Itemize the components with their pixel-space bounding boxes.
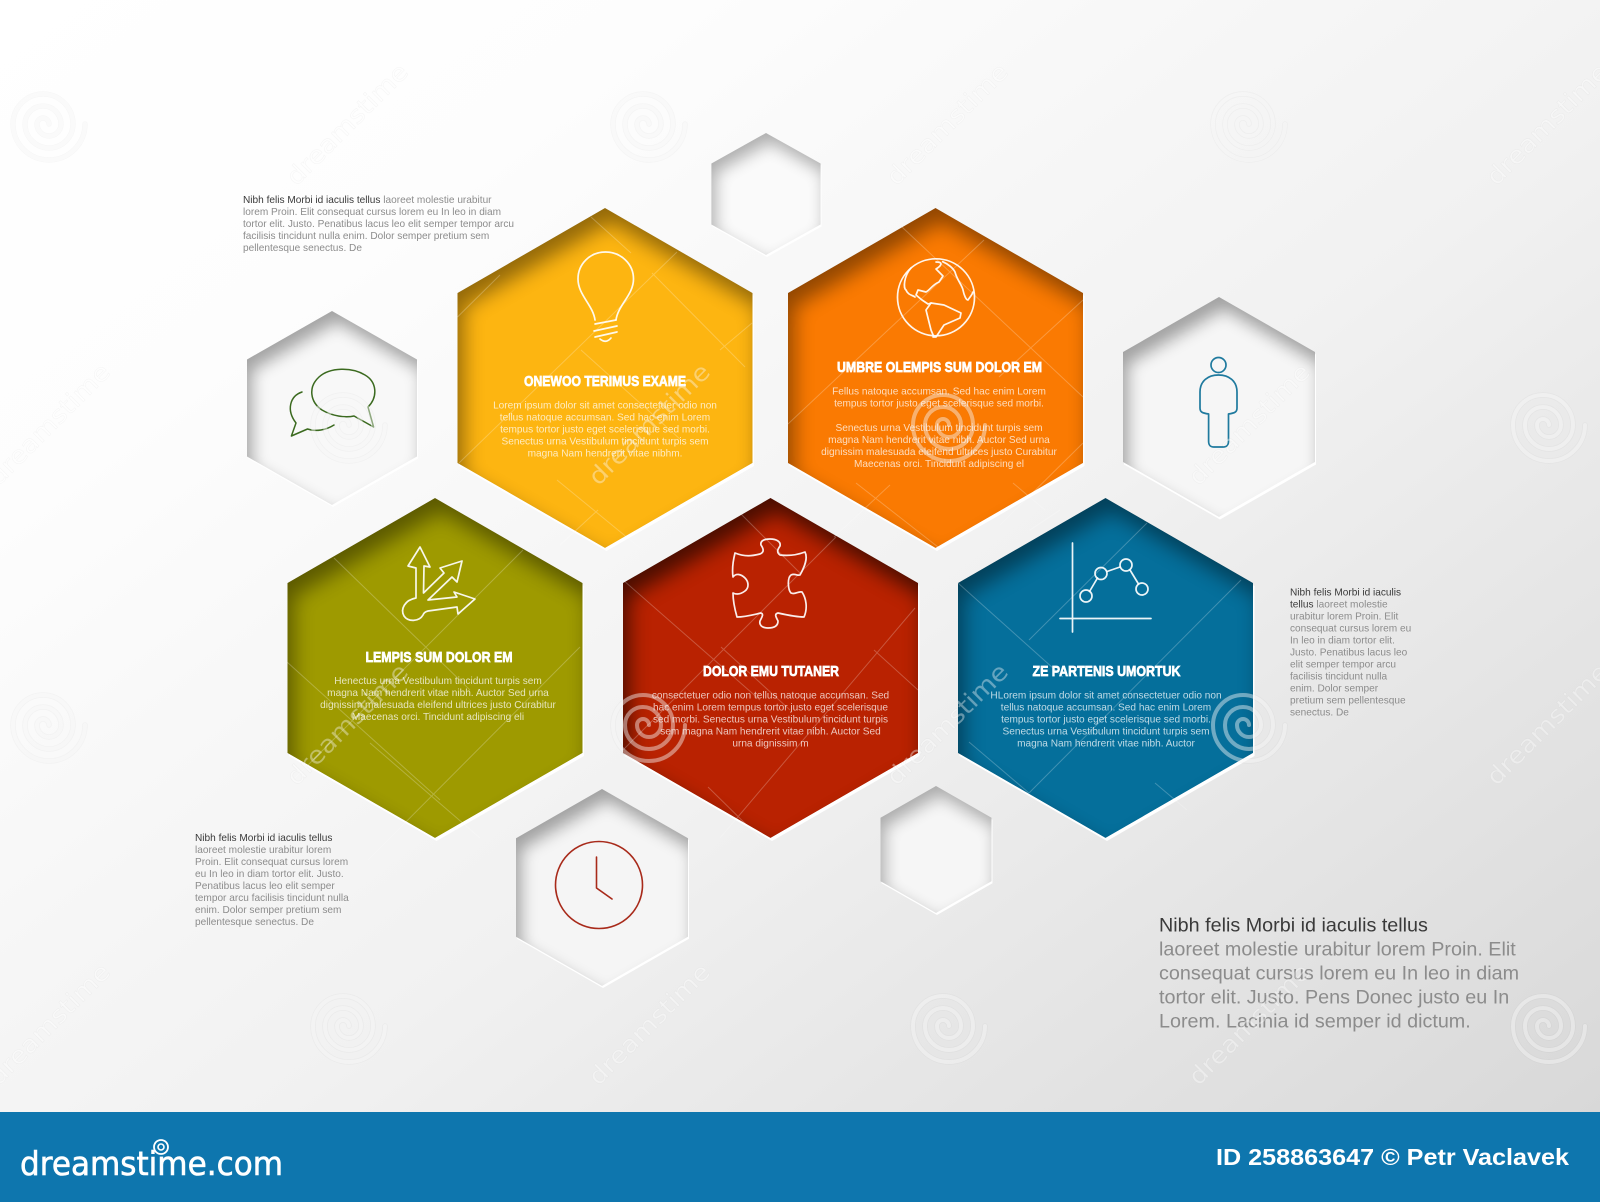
icon: branching arrows [403, 547, 475, 620]
note: bottom right large: consequat cursus lorem eu In leo in diam [1159, 962, 1519, 984]
watermark wordmarks: dreamstime [881, 58, 1014, 191]
heading: orange: UMBRE OLEMPIS SUM DOLOR EM [837, 359, 1042, 376]
panel: olive hexagon [288, 498, 584, 841]
note: bottom left: Nibh felis Morbi id iaculis tellus [195, 833, 332, 844]
note: bottom left: tempor arcu facilisis tincidunt nulla [195, 893, 349, 904]
text block: blue: tempus tortor justo eget scelerisque sed morbi. [1001, 714, 1211, 726]
icon: puzzle piece [733, 539, 806, 628]
text block: olive: Henectus urna Vestibulum tincidunt turpis sem [334, 676, 542, 687]
icon: light bulb [578, 252, 634, 341]
text block: orange: Fellus natoque accumsan. Sed hac enim Lorem [832, 386, 1046, 398]
note: bottom left: Proin. Elit consequat cursus lorem [195, 857, 348, 868]
watermark wordmarks: dreamstime [1183, 358, 1316, 491]
note: bottom left: laoreet molestie urabitur lorem [195, 845, 331, 856]
note: right: laoreet molestie [1314, 600, 1388, 610]
note: right: tellus [1290, 600, 1314, 610]
watermark wordmarks: dreamstime [583, 358, 716, 491]
note: bottom right large: Nibh felis Morbi id iaculis tellus [1159, 914, 1428, 936]
note: top left: Nibh felis Morbi id iaculis tellus [243, 195, 380, 206]
panel: red hexagon [623, 498, 920, 841]
note: top left: facilisis tincidunt nulla enim. Dolor semper pretium sem [243, 231, 489, 242]
note: right: enim. Dolor semper [1290, 684, 1379, 694]
note: right: pretium sem pellentesque [1290, 696, 1406, 706]
note: bottom right large: laoreet molestie urabitur lorem Proin. Elit [1159, 938, 1516, 960]
watermark wordmarks: dreamstime [1481, 658, 1600, 791]
heading: blue: ZE PARTENIS UMORTUK [1032, 663, 1181, 680]
note: right: senectus. De [1290, 708, 1349, 718]
panel: blank small hexagon top [711, 133, 821, 255]
icon: speech bubbles [290, 369, 375, 436]
text block: blue: magna Nam hendrerit vitae nibh. Auctor [1017, 738, 1196, 750]
note: bottom left: eu In leo in diam tortor elit. Justo. [195, 869, 344, 880]
icon: globe [898, 259, 974, 337]
watermark overlay lines [287, 217, 1241, 860]
note: bottom left: enim. Dolor semper pretium sem [195, 905, 341, 916]
panel: blank small hexagon bottom [880, 786, 992, 915]
text block: orange: Senectus urna Vestibulum tincidunt turpis sem [835, 423, 1043, 434]
panel: clock hexagon [516, 789, 689, 988]
panel: person hexagon [1123, 297, 1316, 520]
text block: orange: magna Nam hendrerit vitae nibh. Auctor Sed urna [828, 435, 1050, 446]
icon: clock [556, 842, 642, 928]
heading: yellow: ONEWOO TERIMUS EXAME [524, 373, 686, 390]
note: top left: pellentesque senectus. De [243, 243, 362, 254]
note: top left: tortor elit. Justo. Penatibus lacus leo elit semper tempor arcu [243, 219, 514, 230]
text block: yellow: tempus tortor justo eget scelerisque sed morbi. [500, 424, 710, 436]
text block: red: urna dignissim m [732, 738, 809, 750]
text block: red: sem magna Nam hendrerit vitae nibh. Auctor Sed [660, 726, 881, 738]
text block: olive: magna Nam hendrerit vitae nibh. Auctor Sed urna [327, 688, 549, 699]
text block: red: sed morbi. Senectus urna Vestibulum tincidunt turpis [653, 714, 888, 726]
note: right: elit semper tempor arcu [1290, 660, 1396, 670]
note: bottom right large: tortor elit. Justo. Pens Donec justo eu In [1159, 986, 1509, 1008]
heading: olive: LEMPIS SUM DOLOR EM [366, 649, 512, 666]
note: right: In leo in diam tortor elit. [1290, 636, 1395, 646]
text block: orange: Maecenas orci. Tincidunt adipiscing el [854, 459, 1024, 470]
note: right: Nibh felis Morbi id iaculis [1290, 588, 1401, 598]
text block: orange: dignissim malesuada eleifend ultrices justo Curabitur [821, 447, 1057, 458]
heading: red: DOLOR EMU TUTANER [703, 663, 839, 680]
panel: yellow hexagon [458, 208, 754, 550]
text block: red: consectetuer odio non tellus natoque accumsan. Sed [652, 690, 889, 702]
text block: olive: dignissim malesuada eleifend ultrices justo Curabitur [320, 700, 556, 711]
footer bar [0, 1112, 1600, 1202]
icon: footer logo spiral [154, 1140, 168, 1154]
panel: blue hexagon [958, 498, 1254, 841]
text block: yellow: tellus natoque accumsan. Sed hac enim Lorem [500, 412, 710, 424]
text block: blue: tellus natoque accumsan. Sed hac enim Lorem [1001, 702, 1211, 714]
watermark wordmarks: dreamstime [281, 58, 414, 191]
watermark wordmarks: dreamstime [583, 958, 716, 1091]
panel: orange hexagon [788, 208, 1084, 551]
watermark spirals [13, 94, 1585, 1062]
watermark wordmarks: dreamstime [1481, 58, 1600, 191]
note: bottom left: Penatibus lacus leo elit semper [195, 881, 335, 892]
icon: line chart [1060, 543, 1151, 632]
text block: yellow: Lorem ipsum dolor sit amet consectetuer odio non [493, 400, 717, 412]
note: bottom right large: Lorem. Lacinia id semper id dictum. [1159, 1010, 1471, 1032]
note: right: facilisis tincidunt nulla [1290, 672, 1387, 682]
note: right: urabitur lorem Proin. Elit [1290, 612, 1398, 622]
watermark wordmarks: dreamstime [281, 658, 414, 791]
watermark wordmarks: dreamstime [1183, 958, 1316, 1091]
footer logo text: dreamstime.com [20, 1144, 283, 1183]
footer credit: ID 258863647 © Petr Vaclavek [1216, 1144, 1569, 1170]
note: bottom left: pellentesque senectus. De [195, 917, 314, 928]
note: right: Justo. Penatibus lacus leo [1290, 648, 1408, 658]
text block: blue: Senectus urna Vestibulum tincidunt turpis sem [1002, 726, 1210, 738]
text block: orange: tempus tortor justo eget scelerisque sed morbi. [834, 398, 1044, 410]
text block: yellow: magna Nam hendrerit vitae nibhm. [528, 448, 682, 460]
note: right: consequat cursus lorem eu [1290, 624, 1411, 634]
watermark wordmarks: dreamstime [881, 658, 1014, 791]
text block: blue: HLorem ipsum dolor sit amet consectetuer odio non [990, 690, 1222, 702]
text block: olive: Maecenas orci. Tincidunt adipiscing eli [352, 712, 524, 723]
note: top left: lorem Proin. Elit consequat cursus lorem eu In leo in diam [243, 207, 501, 218]
note: top left: laoreet molestie urabitur [380, 195, 492, 206]
icon: person [1200, 358, 1237, 447]
text block: red: hac enim Lorem tempus tortor justo eget scelerisque [653, 702, 888, 714]
panel: chat hexagon [247, 311, 417, 505]
text block: yellow: Senectus urna Vestibulum tincidunt turpis sem [501, 436, 709, 448]
